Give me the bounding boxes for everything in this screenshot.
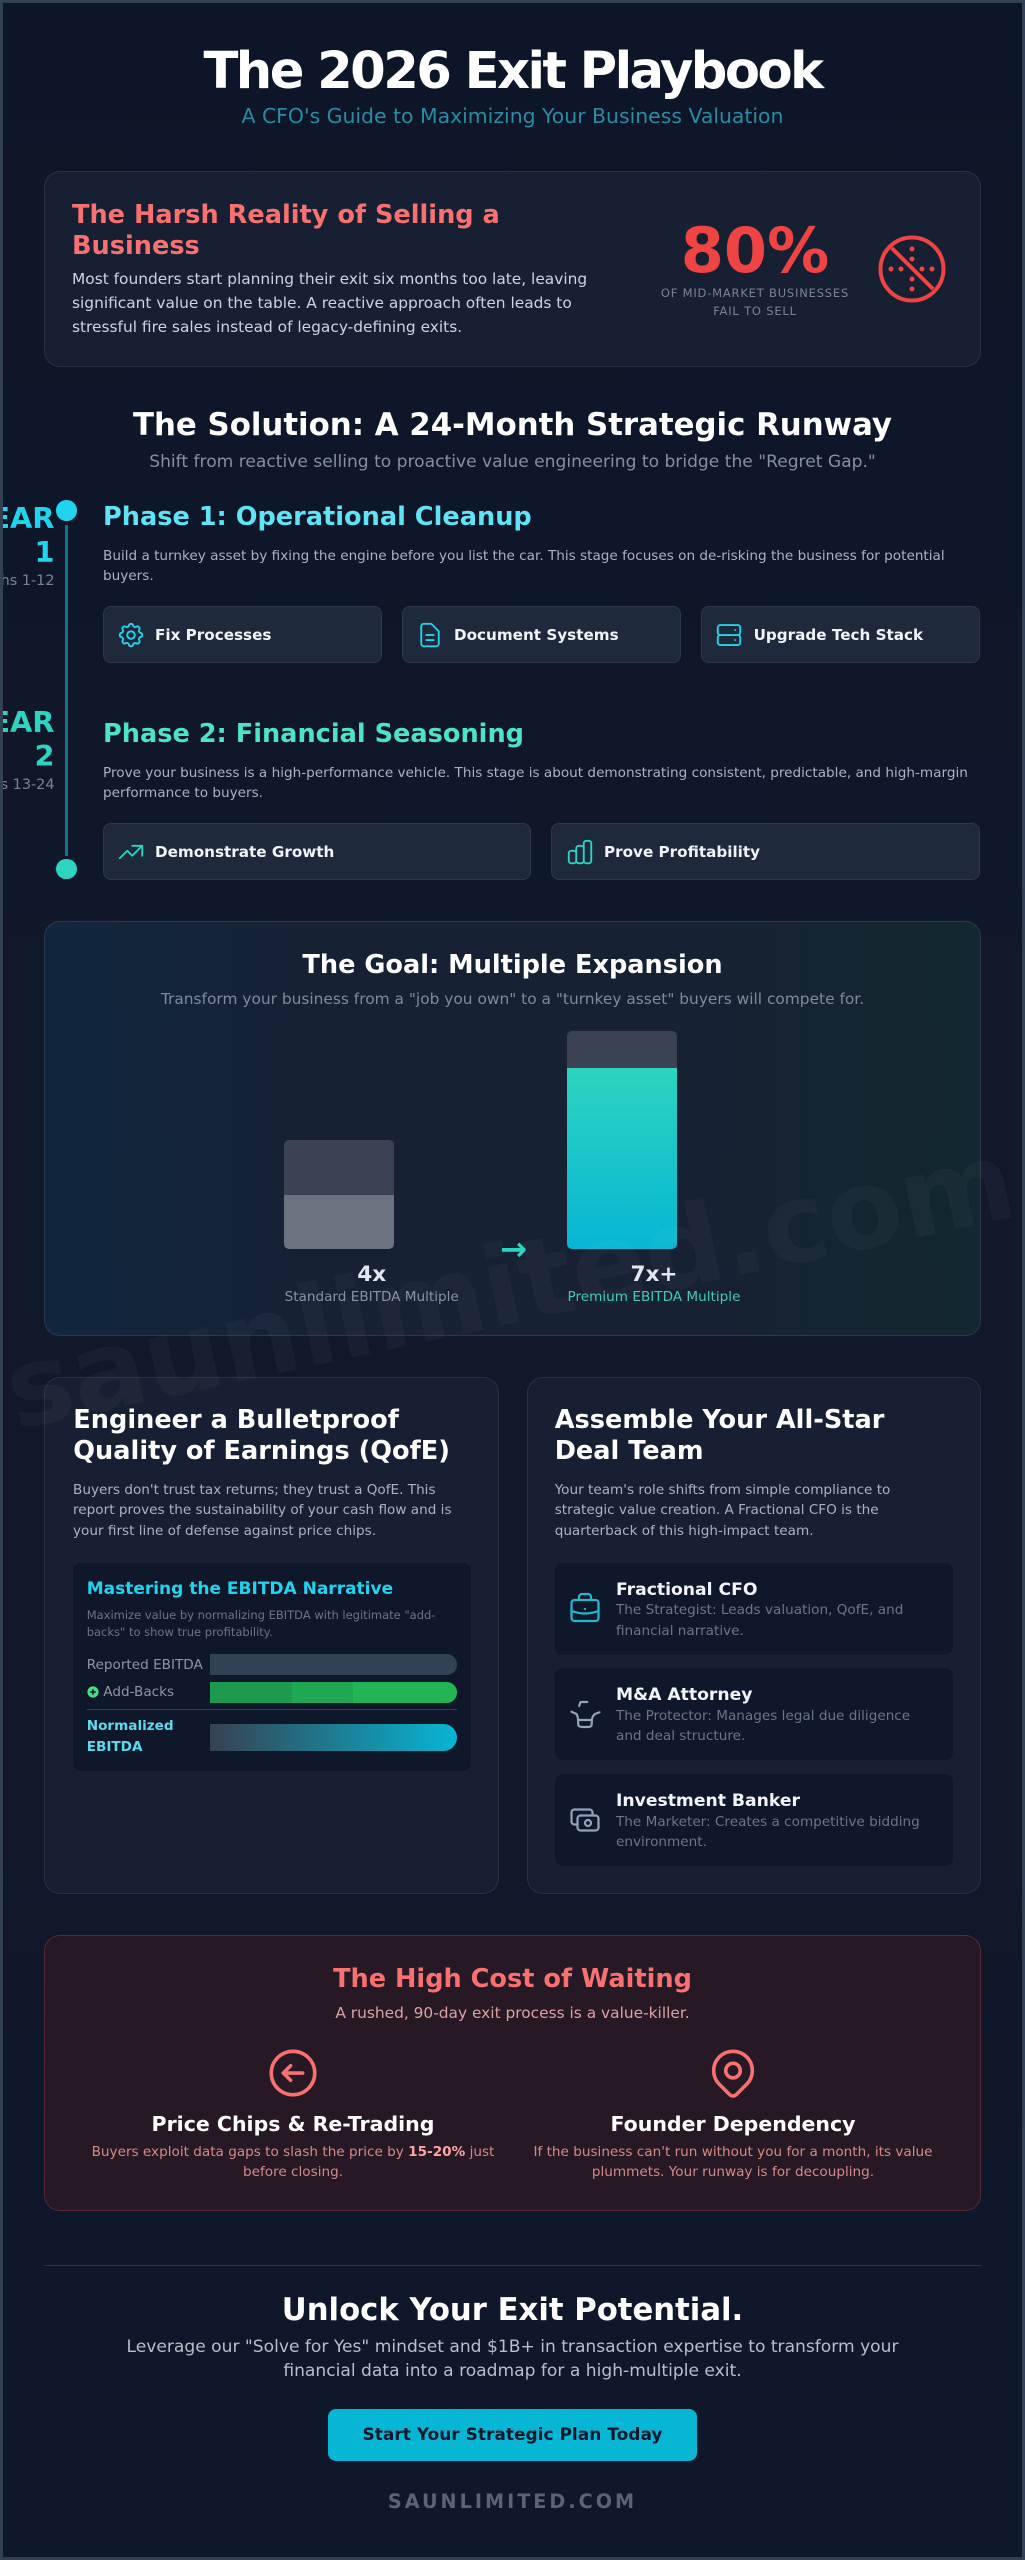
- chip: upgrade tech stack: [701, 606, 980, 663]
- heading: phase 2: Phase 2: Financial Seasoning: [103, 719, 524, 749]
- heading: ebitda narrative: Mastering the EBITDA Narrative: [87, 1579, 393, 1599]
- chip: document systems: [402, 606, 681, 663]
- icon: arrow circle left: [269, 2050, 317, 2097]
- text: deal team body: strategic value creation. A Fractional CFO is the: [555, 1502, 879, 1518]
- text: qofe body: Buyers don't trust tax returns; they trust a QofE. This: [73, 1482, 436, 1498]
- heading: cost of waiting: The High Cost of Waiting: [333, 1964, 692, 1994]
- arrow: →: [500, 1230, 527, 1268]
- timeline line with dots: [56, 500, 77, 879]
- text: harsh reality body: stressful fire sales instead of legacy-defining exits.: [72, 318, 462, 336]
- heading: qofe: Engineer a Bulletproof: [73, 1405, 399, 1435]
- text: deal team body: quarterback of this high-impact team.: [555, 1523, 814, 1539]
- label: fix processes: Fix Processes: [155, 626, 271, 644]
- watermark: saunlimited.com: [0, 1116, 1025, 1454]
- heading: qofe: Quality of Earnings (QofE): [73, 1436, 450, 1466]
- heading: qofe: [73, 1405, 450, 1466]
- heading: deal team: [554, 1405, 884, 1466]
- column: founder dependency: [533, 2050, 933, 2180]
- name: investment banker: Investment Banker: [616, 1791, 800, 1811]
- text: m&a attorney: The Protector: Manages legal due diligence: [616, 1708, 910, 1724]
- panel: cost of waiting: [44, 1935, 981, 2211]
- heading: unlock: Unlock Your Exit Potential.: [282, 2292, 743, 2328]
- label: prove profitability: Prove Profitability: [604, 842, 760, 860]
- icon: cog: [118, 622, 144, 648]
- text: ebitda narrative: backs" to show true profitability.: [87, 1625, 273, 1639]
- icon: server: [716, 624, 742, 646]
- panel: quality of earnings: [44, 1377, 498, 1894]
- text: harsh reality body: [72, 270, 587, 336]
- text: phase 1 body: Build a turnkey asset by fixing the engine before you list the car. This stage focuses on de-risking the business for potential: [103, 548, 945, 564]
- stat caption: FAIL TO SELL: [713, 304, 797, 318]
- icon: scale: [570, 1700, 601, 1728]
- text: m&a attorney: [616, 1708, 910, 1744]
- heading: the goal: The Goal: Multiple Expansion: [302, 950, 723, 980]
- panel: ebitda narrative: [73, 1562, 471, 1771]
- subheading: the goal: Transform your business from a "job you own" to a "turnkey asset" buyers will compete for.: [161, 990, 864, 1008]
- chip: demonstrate growth: [103, 823, 531, 880]
- text: harsh reality body: Most founders start planning their exit six months too late, leaving: [72, 270, 587, 288]
- text: deal team body: [554, 1482, 890, 1539]
- panel: deal team: [527, 1377, 981, 1894]
- bar: reported: [210, 1654, 457, 1675]
- card: investment banker: [555, 1774, 953, 1866]
- stat caption: OF MID-MARKET BUSINESSES: [661, 286, 849, 300]
- chip: fix processes: [103, 606, 382, 663]
- icon: trending up: [118, 844, 144, 860]
- heading: deal team: Assemble Your All-Star: [555, 1405, 884, 1435]
- heading: deal team: Deal Team: [555, 1436, 704, 1466]
- subheading: the solution: Shift from reactive selling to proactive value engineering to bridge the "Regret Gap.": [149, 452, 876, 472]
- text: investment banker: The Marketer: Creates a competitive bidding: [616, 1814, 920, 1830]
- text: harsh reality body: significant value on the table. A reactive approach often leads to: [72, 294, 572, 312]
- label: reported ebitda: Reported EBITDA: [87, 1657, 203, 1673]
- chip: prove profitability: [551, 823, 980, 880]
- bar: standard multiple: [284, 1140, 394, 1249]
- panel: phase 1: [103, 502, 980, 663]
- button: [328, 2409, 697, 2461]
- icon: bar chart: [568, 840, 592, 864]
- label: normalized ebitda: EBITDA: [87, 1739, 142, 1755]
- caption: premium: Premium EBITDA Multiple: [568, 1289, 740, 1305]
- text: price chips: [92, 2144, 494, 2180]
- panel: harsh reality: [44, 171, 981, 367]
- text: deal team body: Your team's role shifts from simple compliance to: [555, 1482, 890, 1498]
- label: demonstrate growth: Demonstrate Growth: [155, 842, 334, 860]
- text: m&a attorney: and deal structure.: [616, 1728, 745, 1744]
- icon: plus circle: [87, 1686, 99, 1698]
- text: founder dependency: plummets. Your runway is for decoupling.: [592, 2164, 874, 2180]
- label: upgrade tech stack: Upgrade Tech Stack: [754, 626, 923, 644]
- text: qofe body: report proves the sustainability of your cash flow and is: [73, 1502, 452, 1518]
- text: qofe body: [73, 1482, 452, 1539]
- column: price chips: [92, 2050, 494, 2180]
- text: phase 2 body: performance to buyers.: [103, 785, 263, 801]
- label: year 2: 2: [34, 739, 54, 773]
- text: fractional cfo: The Strategist: Leads valuation, QofE, and: [616, 1602, 903, 1618]
- label: year 2: [0, 705, 54, 793]
- text: qofe body: your first line of defense against price chips.: [73, 1523, 376, 1539]
- icon: briefcase: [570, 1592, 600, 1622]
- text: fractional cfo: [616, 1602, 903, 1638]
- footer: site name: SAUNLIMITED.COM: [388, 2490, 637, 2513]
- icon: location pin: [712, 2050, 754, 2098]
- card: m&a attorney: [555, 1668, 953, 1760]
- icon: cash: [570, 1808, 600, 1832]
- label: year 1: 1: [34, 535, 54, 569]
- title: The 2026 Exit Playbook: [203, 41, 822, 101]
- heading: price chips: Price Chips & Re-Trading: [152, 2112, 434, 2136]
- heading: harsh reality: The Harsh Reality of Selling a: [72, 200, 500, 230]
- icon: no-dots circle: [878, 236, 946, 302]
- bar: normalized: [210, 1724, 457, 1751]
- bar: premium multiple: [567, 1031, 677, 1249]
- text: investment banker: [616, 1814, 920, 1850]
- button: Start Your Strategic Plan Today: [362, 2425, 662, 2445]
- text: ebitda narrative: [87, 1608, 435, 1639]
- text: ebitda narrative: Maximize value by normalizing EBITDA with legitimate "add-: [87, 1608, 435, 1622]
- text: phase 1 body: [103, 548, 945, 584]
- label: document systems: Document Systems: [454, 626, 619, 644]
- label: add-backs: Add-Backs: [103, 1684, 174, 1700]
- heading: founder dependency: Founder Dependency: [610, 2112, 856, 2136]
- label: normalized ebitda: [87, 1718, 174, 1755]
- bar: add-backs: [210, 1682, 457, 1703]
- name: m&a attorney: M&A Attorney: [616, 1685, 752, 1705]
- subtitle: A CFO's Guide to Maximizing Your Business Valuation: [242, 104, 783, 128]
- text: price chips: Buyers exploit data gaps to slash the price by 15-20% just: [92, 2144, 494, 2160]
- text: price chips: before closing.: [243, 2164, 343, 2180]
- heading: the solution: The Solution: A 24-Month Strategic Runway: [133, 407, 892, 443]
- value: 7x+: 7x+: [630, 1262, 678, 1286]
- value: 4x: 4x: [357, 1262, 386, 1286]
- panel: the goal: [44, 921, 981, 1336]
- heading: harsh reality: Business: [72, 231, 200, 261]
- card: fractional cfo: [555, 1562, 953, 1654]
- text: phase 2 body: [103, 765, 968, 801]
- text: phase 1 body: buyers.: [103, 568, 154, 584]
- heading: phase 1: Phase 1: Operational Cleanup: [103, 502, 532, 532]
- heading: harsh reality: [72, 200, 500, 261]
- caption: standard: Standard EBITDA Multiple: [285, 1289, 459, 1305]
- text: fractional cfo: financial narrative.: [616, 1622, 744, 1638]
- text: unlock: [126, 2337, 899, 2381]
- stat: 80%: 80%: [681, 214, 829, 286]
- stat caption: [661, 286, 849, 318]
- text: unlock: financial data into a roadmap for a high-multiple exit.: [283, 2361, 742, 2381]
- icon: document: [420, 622, 440, 648]
- label: normalized ebitda: Normalized: [87, 1718, 174, 1734]
- subheading: cost of waiting: A rushed, 90-day exit process is a value-killer.: [335, 2004, 690, 2022]
- text: unlock: Leverage our "Solve for Yes" mindset and $1B+ in transaction expertise to transform your: [126, 2337, 899, 2357]
- label: year 1: [0, 501, 54, 589]
- text: investment banker: environment.: [616, 1834, 707, 1850]
- panel: phase 2: [103, 719, 980, 880]
- text: founder dependency: If the business can't run without you for a month, its value: [533, 2144, 933, 2160]
- text: founder dependency: [533, 2144, 933, 2180]
- name: fractional cfo: Fractional CFO: [616, 1580, 757, 1600]
- text: phase 2 body: Prove your business is a high-performance vehicle. This stage is about demonstrating consistent, predictable, and high-margin: [103, 765, 968, 781]
